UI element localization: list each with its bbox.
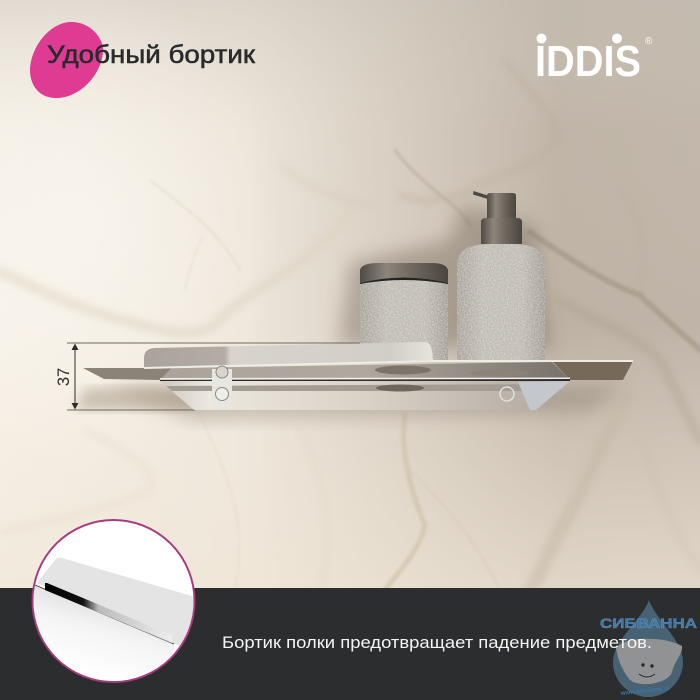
dimension top line <box>67 342 372 344</box>
watermark url: www.sibvanna.ru <box>620 686 670 697</box>
soap bottle <box>457 191 545 361</box>
watermark face <box>639 663 655 677</box>
title text: Удобный бортик <box>47 41 256 69</box>
dimension arrow <box>72 344 78 410</box>
shelf tray underside left <box>83 368 172 380</box>
heading: pink blob and title <box>30 22 256 98</box>
watermark: sibvanna <box>600 600 697 697</box>
logo dots <box>536 34 622 44</box>
shelf top edge <box>144 360 633 369</box>
pink blob <box>30 22 103 98</box>
bottle body <box>457 244 545 361</box>
iddis logo: IDDIS <box>535 37 641 86</box>
bottle pump stem <box>487 193 516 220</box>
jar body <box>360 276 448 361</box>
dimension label: 37 <box>55 368 73 386</box>
jar lid <box>360 263 448 283</box>
inset shelf detail <box>34 558 194 681</box>
caption text: Бортик полки предотвращает падение предметов. <box>222 634 652 652</box>
watermark drop <box>613 600 683 697</box>
shelf raised rail <box>144 342 433 367</box>
dimension bottom line <box>67 409 195 411</box>
dimension: 37 <box>55 343 372 410</box>
jar <box>360 263 448 361</box>
mounting screws <box>212 366 530 410</box>
cast shadows on wall <box>75 205 625 420</box>
shelf upper band <box>160 362 570 380</box>
inset detail circle <box>20 520 195 690</box>
bottle collar <box>481 218 522 244</box>
watermark bath <box>616 639 682 684</box>
shelf front body <box>160 381 570 410</box>
registered mark: ® <box>645 36 653 47</box>
inset background <box>32 520 194 682</box>
shelf <box>83 342 633 410</box>
bottle nozzle <box>473 191 491 200</box>
watermark name: СИБВАННА <box>600 616 697 631</box>
bottom dark band <box>0 588 700 700</box>
shelf tray underside right <box>552 361 633 380</box>
